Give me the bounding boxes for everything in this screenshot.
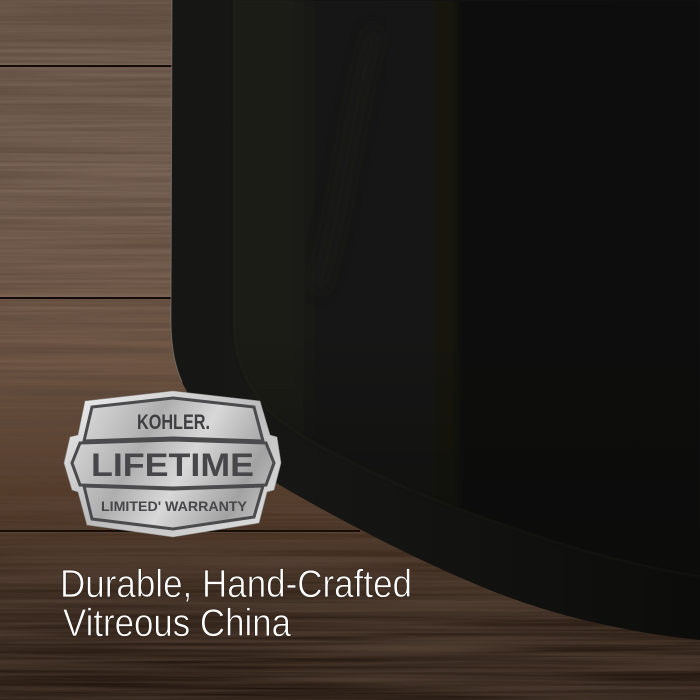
KOHLER logo: KOHLER.	[137, 411, 210, 434]
caption line one: Durable, Hand-Crafted	[60, 563, 412, 606]
LIFETIME label: LIFETIME	[91, 447, 254, 483]
caption line two: Vitreous China	[63, 602, 291, 645]
black sink basin	[171, 0, 700, 640]
badge top panel	[84, 398, 263, 441]
sink outer rim	[171, 0, 700, 640]
limited warranty label: LIMITED' WARRANTY	[101, 498, 248, 514]
sink inner bowl	[234, 0, 700, 577]
warranty badge	[64, 391, 281, 537]
bowl soft highlight	[318, 30, 376, 290]
caption	[60, 563, 412, 645]
badge bottom panel	[84, 486, 263, 529]
badge outer silver frame	[64, 391, 281, 537]
badge middle panel	[72, 440, 274, 488]
